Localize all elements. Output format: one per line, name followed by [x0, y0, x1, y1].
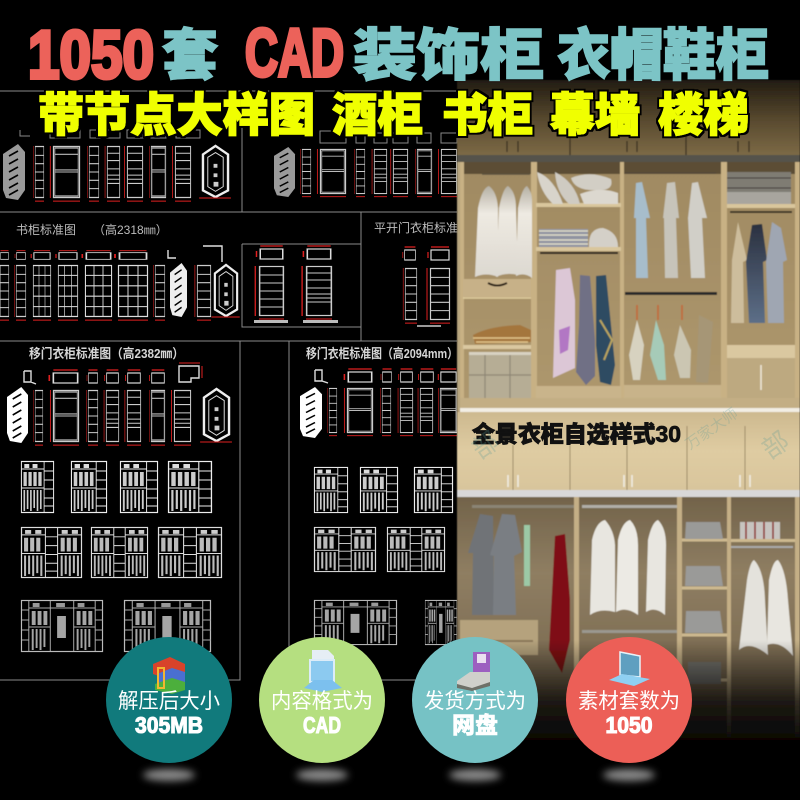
- lower left column contents: [460, 505, 574, 673]
- lower fourth column contents: [731, 522, 795, 656]
- value: CAD: [303, 712, 341, 738]
- drawing: wardrobe elevations 2382: [7, 363, 232, 445]
- drawing: wardrobe plans 2094 row 1: [314, 467, 453, 513]
- title: CAD: CAD: [245, 15, 344, 91]
- subtitle: 幕墙: 幕墙: [550, 89, 640, 141]
- subtitle: 带节点大样图: 带节点大样图: [38, 89, 315, 141]
- floor shadows: [143, 769, 655, 781]
- left column contents: [463, 174, 532, 398]
- heading: hinged door wardrobe: 平开门衣柜标准图: [374, 220, 470, 235]
- drawing: wardrobe plans 2094 row 2: [315, 527, 445, 572]
- title: 衣帽鞋柜: 衣帽鞋柜: [557, 24, 769, 87]
- drawing: sliding wardrobe elevation top right: [274, 131, 457, 197]
- label: 解压后大小: [118, 690, 220, 713]
- drawing: hinged wardrobe: [403, 247, 450, 327]
- panel frame lines: [0, 91, 457, 680]
- icon: floppy and drive: [457, 652, 490, 691]
- drawing: sliding wardrobe elevation top left: [3, 130, 231, 201]
- label: 素材套数为: [578, 690, 680, 713]
- panel: CAD drawings: [0, 91, 470, 680]
- lower third column contents: [682, 522, 727, 684]
- title: 1050: 1050: [28, 17, 154, 93]
- third column contents: [624, 173, 721, 398]
- upper wardrobe: [457, 80, 800, 412]
- value: 1050: [606, 712, 652, 738]
- watermark: 部: [466, 425, 505, 465]
- watermark: 部: [756, 425, 795, 465]
- drawing: wardrobe plans 2382 row 2: [22, 527, 221, 578]
- drawing: wardrobe plans 2382 row 3: [21, 600, 211, 652]
- heading: sliding door wardrobe 2382: 移门衣柜标准图（高2382㎜）: [29, 346, 184, 361]
- icon: document monitor: [304, 650, 342, 692]
- photo: wardrobe render: [457, 80, 800, 752]
- label: 发货方式为: [424, 690, 526, 713]
- subtitle: 楼梯: 楼梯: [658, 89, 749, 141]
- title line 2: [38, 89, 749, 141]
- icon: archive books: [153, 657, 185, 694]
- drawing: wardrobe elevations 2094: [300, 369, 457, 438]
- title: 装饰柜: 装饰柜: [353, 24, 544, 87]
- drawing: wardrobe plans 2382 row 1: [21, 462, 211, 512]
- badge: extracted size: [106, 637, 232, 763]
- value: 305MB: [135, 712, 203, 738]
- drawing: wardrobe plans 2094 row 3: [314, 600, 457, 645]
- value: 网盘: [452, 712, 498, 738]
- icon: laptop: [609, 652, 650, 686]
- second column contents: [536, 172, 621, 400]
- watermark: 万家大师: [683, 405, 741, 453]
- badge: delivery method: [412, 637, 538, 763]
- title line 1: [28, 15, 769, 93]
- badge: material count: [566, 637, 692, 763]
- subtitle: 书柜: 书柜: [442, 89, 533, 141]
- heading: bookcase height: （高2318㎜）: [93, 222, 168, 237]
- heading: bookcase standard drawing: 书柜标准图: [16, 223, 76, 237]
- lower second column contents: [582, 505, 677, 633]
- label: 内容格式为: [271, 690, 373, 713]
- drawing: bookcase elevations: [0, 246, 240, 320]
- photo label: panoramic wardrobe styles: 全景衣柜自选样式30: [472, 421, 681, 447]
- badge: content format: [259, 637, 385, 763]
- fourth column contents: [727, 172, 795, 400]
- title: 套: 套: [162, 24, 218, 87]
- drawing: boxed cabinets: [254, 246, 338, 323]
- subtitle: 酒柜: 酒柜: [332, 89, 423, 141]
- watermark: [466, 405, 795, 465]
- heading: sliding door wardrobe 2094: 移门衣柜标准图（高2094mm）: [306, 346, 458, 361]
- lower wardrobe: [457, 412, 800, 752]
